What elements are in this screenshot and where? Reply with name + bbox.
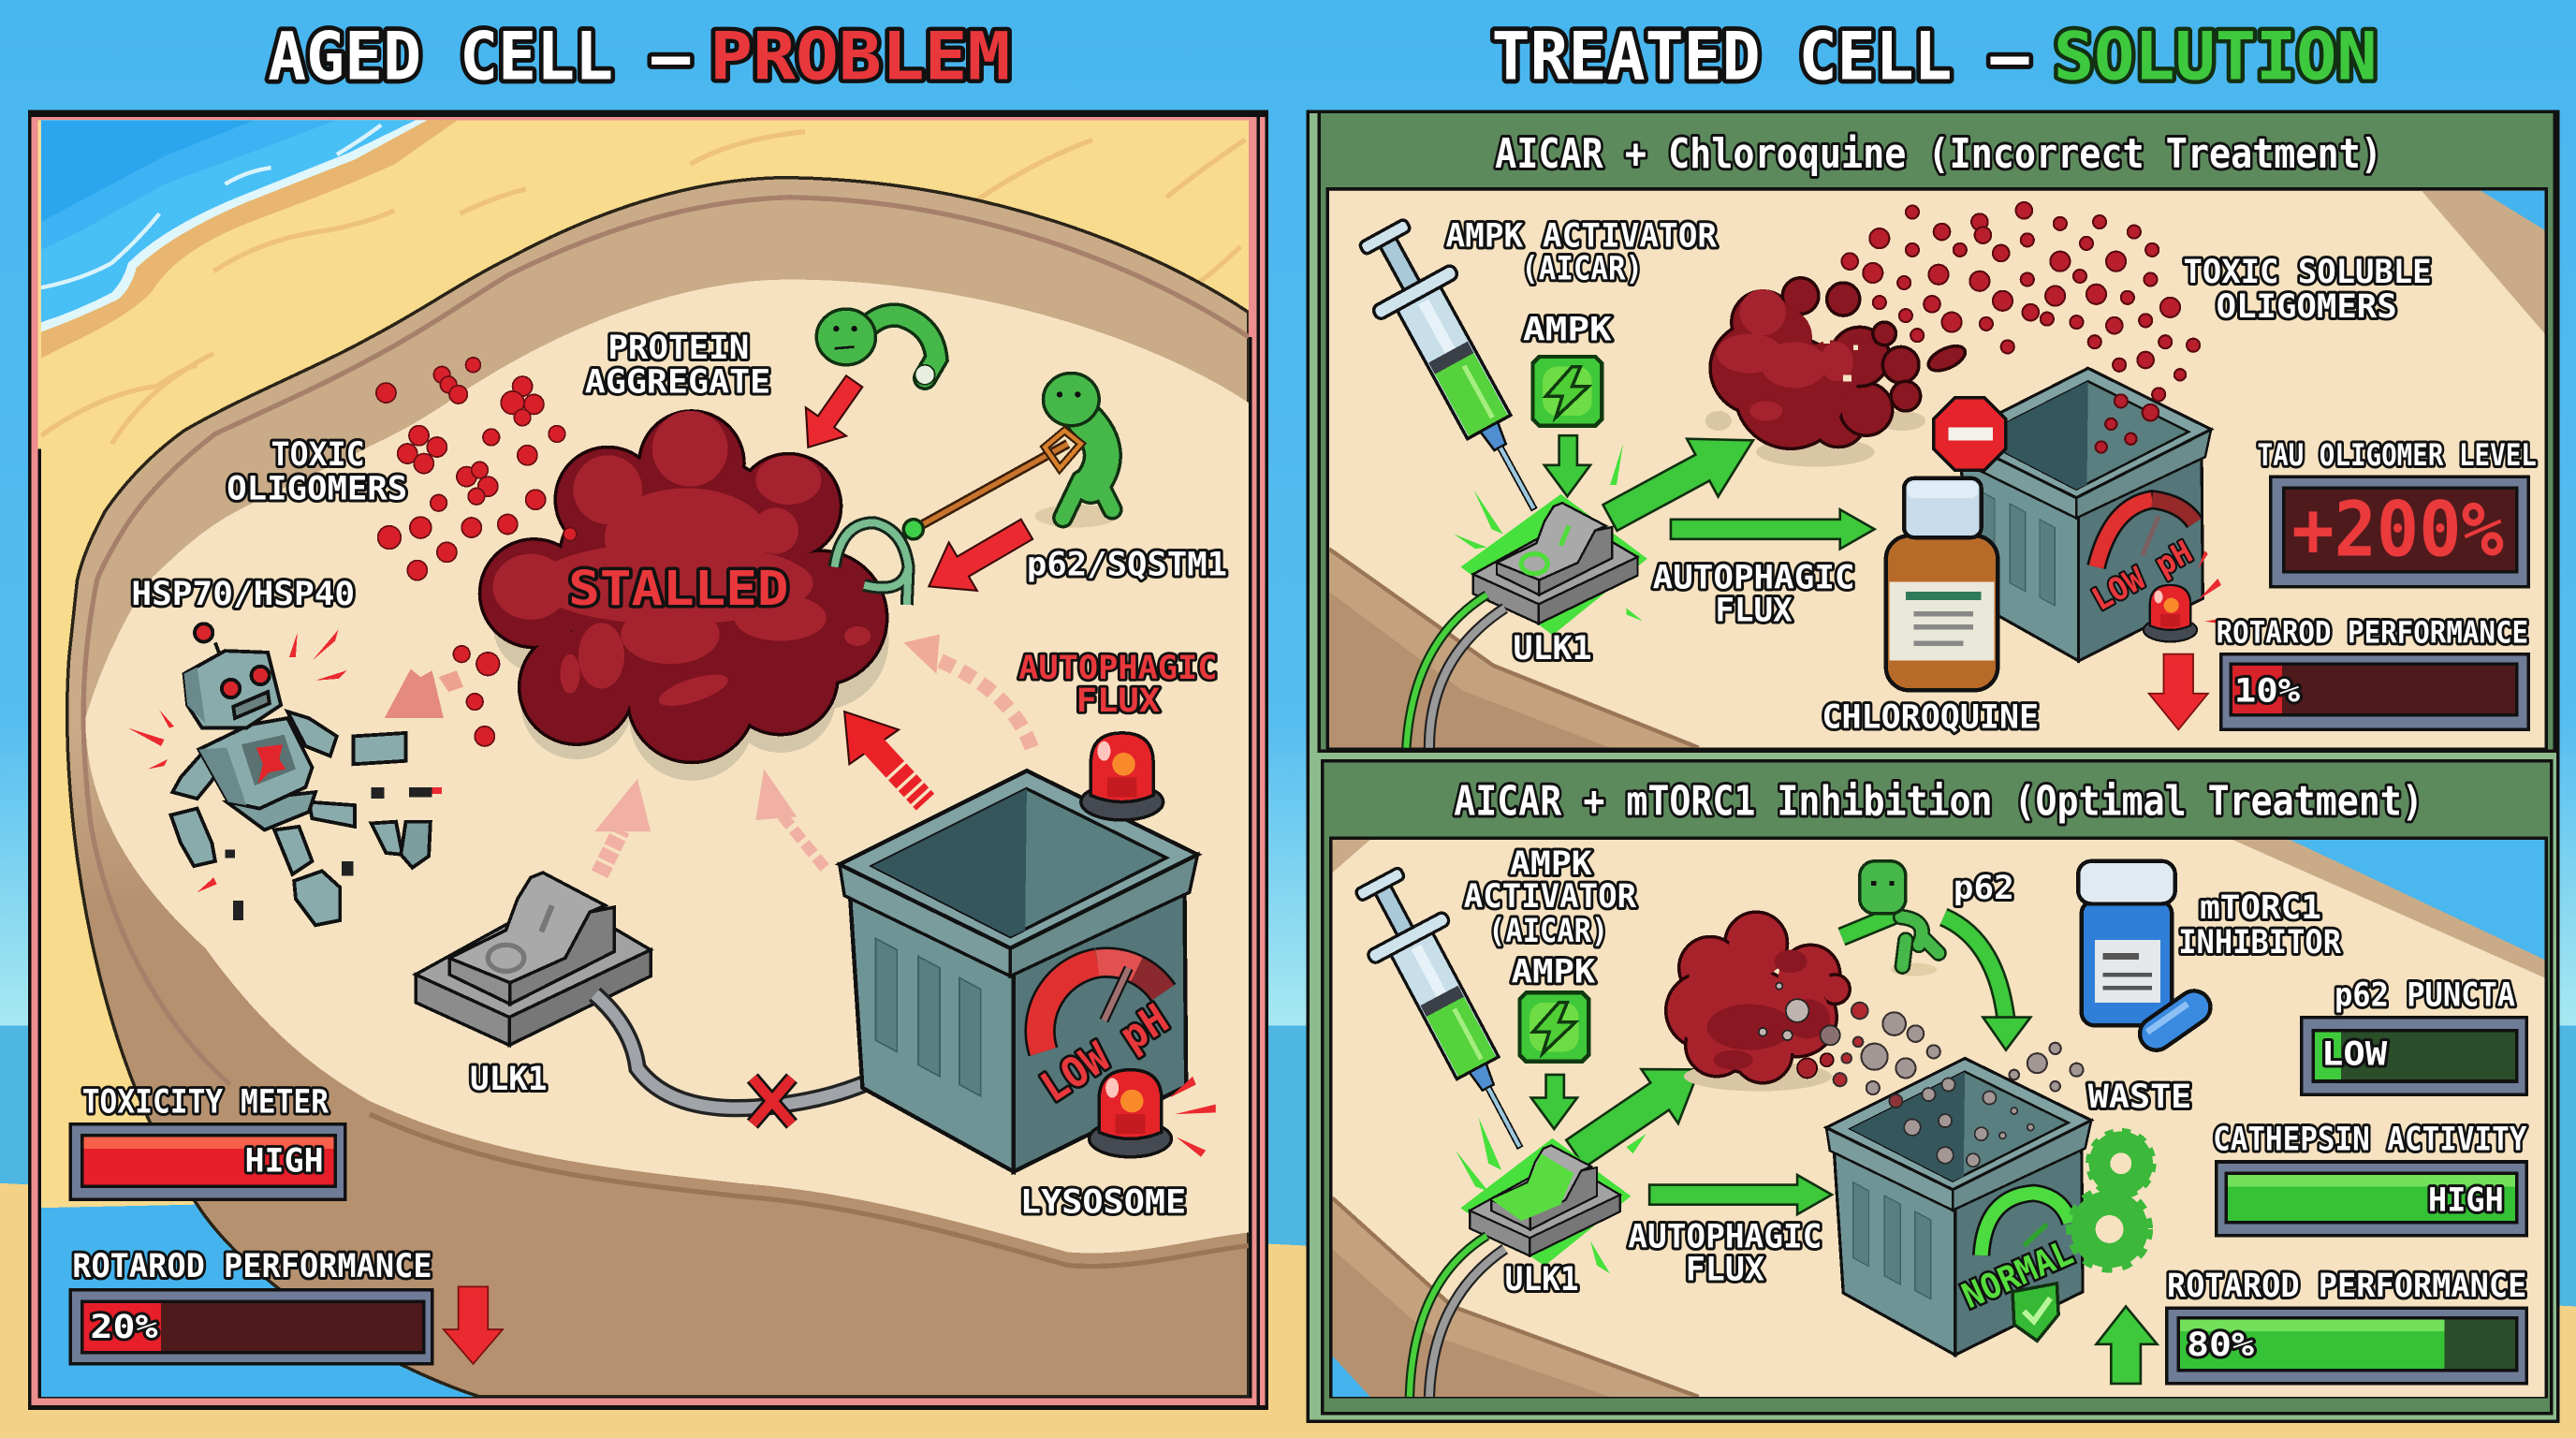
meter: p62 puncta: p62 PUNCTA (2334, 976, 2515, 1014)
title: treated cell solution (1492, 18, 2378, 95)
scene background: mtorc1 (1332, 840, 2545, 1397)
label: toxic oligomers: TOXIC (271, 435, 365, 474)
label: autophagic flux (1018, 649, 1218, 720)
label: autophagic flux: AUTOPHAGIC (1653, 558, 1855, 596)
label: autophagic flux: FLUX (1076, 682, 1160, 720)
label: toxic soluble oligomers: OLIGOMERS (2217, 287, 2397, 326)
icon: p62 worm (816, 309, 936, 385)
icon: siren bottom (1090, 1070, 1171, 1157)
label: autophagic flux: FLUX (1715, 592, 1793, 630)
arrow: autophagic flux (1649, 1175, 1832, 1214)
icon: ulk1 switch active (1454, 444, 1643, 628)
icon: gears (2070, 1132, 2152, 1269)
arrowhead: faded flux curved (903, 635, 940, 674)
meter: rotarod performance 80%: 80% (2187, 1326, 2254, 1364)
label: mtorc1 inhibitor: mTORC1 (2200, 888, 2321, 927)
icon: lysosome bin (840, 770, 1197, 1172)
meter: rotarod performance 10%: ROTAROD PERFORMANCE (2217, 616, 2528, 650)
arrow: ampk to ulk1 (1544, 435, 1590, 496)
label: ulk1: ULK1 (1513, 629, 1592, 668)
label: ulk1: ULK1 (1505, 1260, 1579, 1299)
label: autophagic flux (1628, 1217, 1822, 1288)
arrow: p62 figure to aggregate (915, 506, 1041, 610)
header: AICAR + mTORC1 Inhibition (Optimal Treatment) (1454, 778, 2423, 826)
icon: ulk1 switch (416, 873, 651, 1045)
meter: toxicity: TOXICITY METER (82, 1082, 329, 1121)
icon: siren top (1081, 733, 1164, 820)
label: toxic oligomers: OLIGOMERS (227, 470, 407, 508)
panel: aged cell (28, 110, 1268, 1410)
label: ampk: AMPK (1523, 310, 1612, 348)
meter: tau oligomer level: +200% (2291, 486, 2504, 574)
arrow: rotarod down (444, 1286, 503, 1364)
arrow: faded flux curved (940, 661, 1032, 748)
toxic oligomer particles (376, 358, 577, 746)
icon: p62 figure (1860, 861, 1939, 976)
icon: cables (1406, 594, 1505, 748)
title: treated cell solution: TREATED CELL – (1492, 18, 2029, 95)
title: treated cell solution: SOLUTION (2054, 18, 2378, 95)
label: toxic soluble oligomers (2184, 253, 2432, 326)
label: autophagic flux: AUTOPHAGIC (1018, 649, 1218, 687)
meter: tau oligomer level (2258, 439, 2537, 587)
icon: chloroquine bottle (1886, 478, 1998, 690)
label: protein aggregate: PROTEIN (607, 329, 749, 367)
label: toxic oligomers (227, 435, 407, 508)
label: autophagic flux: FLUX (1686, 1250, 1764, 1288)
arrow: ulk1 to aggregate (1557, 1042, 1718, 1181)
label: toxic soluble oligomers: TOXIC SOLUBLE (2184, 253, 2432, 291)
icon: ampk bolt (1519, 992, 1588, 1062)
particles falling in (2096, 352, 2186, 453)
icon: ulk1 switch active (1456, 1118, 1647, 1273)
meter: toxicity (70, 1082, 345, 1199)
header: AICAR + Chloroquine (Incorrect Treatment) (1495, 130, 2382, 178)
icon: alarm sparks (1170, 1077, 1216, 1157)
icon: syringe aicar (1341, 209, 1574, 531)
scene background: chloroquine (1329, 191, 2545, 748)
icon: cables (1410, 1236, 1505, 1397)
meter: rotarod performance 10%: 10% (2234, 672, 2300, 711)
label: waste: WASTE (2088, 1078, 2191, 1116)
label: stalled: STALLED (568, 562, 788, 617)
gauge: normal (1956, 1193, 2079, 1316)
icon: siren (2144, 585, 2197, 641)
icon: ampk bolt (1533, 357, 1602, 426)
icon: severed cable (594, 994, 896, 1124)
label: ampk activator: AMPK ACTIVATOR (1445, 216, 1718, 255)
gauge: normal: NORMAL (1956, 1232, 2079, 1316)
label: chloroquine: CHLOROQUINE (1822, 698, 2039, 737)
subpanel: aicar + mtorc1 inhibition (1321, 759, 2553, 1415)
meter: p62 puncta (2302, 976, 2526, 1094)
arrow: red flux from lysosome (844, 712, 929, 805)
meter: p62 puncta: LOW (2321, 1034, 2388, 1073)
label: ampk activator: (AICAR) (1521, 250, 1643, 288)
label: protein aggregate (585, 329, 770, 402)
meter: toxicity: HIGH (245, 1142, 324, 1181)
icon: check badge (2012, 1284, 2058, 1341)
arrow: p62 curved to bin (1841, 914, 2030, 1050)
meter: rotarod performance 20% (70, 1247, 432, 1364)
waste particles (1834, 1003, 2083, 1094)
label: autophagic flux: AUTOPHAGIC (1628, 1217, 1822, 1255)
label: ampk activator (1445, 216, 1718, 288)
title: aged cell problem: PROBLEM (710, 18, 1010, 95)
arrow: p62 worm to aggregate (788, 367, 874, 462)
arrow: faded flux from lysosome left (755, 770, 825, 868)
meter: tau oligomer level: TAU OLIGOMER LEVEL (2258, 439, 2537, 473)
label: ampk activator: ACTIVATOR (1464, 877, 1637, 916)
label: ampk activator (1464, 844, 1637, 950)
label: protein aggregate: AGGREGATE (585, 363, 770, 402)
arrow: ampk to ulk1 (1531, 1075, 1577, 1129)
icon: active lysosome bin (1826, 1058, 2091, 1355)
icon: p62 figure with hook (835, 374, 1117, 605)
icon: broken hsp robot (128, 624, 442, 925)
meter: cathepsin activity: HIGH (2428, 1181, 2504, 1220)
icon: syringe aicar (1338, 858, 1559, 1168)
gauge: low ph: LOW pH (2086, 534, 2198, 618)
panel: treated cell (1306, 110, 2559, 1423)
waste inside bin (1889, 1078, 2034, 1167)
label: p62: p62 (1954, 869, 2014, 907)
meter: cathepsin activity (2213, 1121, 2526, 1236)
label: mtorc1 inhibitor: INHIBITOR (2178, 923, 2342, 961)
icon: degrading aggregate (1666, 912, 1850, 1092)
label: autophagic flux (1653, 558, 1855, 630)
icon: mtorc1 inhibitor bottle and pill (2078, 861, 2217, 1057)
label: mtorc1 inhibitor (2178, 888, 2342, 961)
label: ampk activator: (AICAR) (1488, 912, 1608, 950)
title: aged cell problem: AGED CELL – (268, 18, 691, 95)
label: ampk: AMPK (1512, 953, 1595, 991)
arrow: ulk1 to aggregate (1594, 411, 1769, 547)
chart element: protein aggregate blob (481, 411, 889, 781)
meter: cathepsin activity: CATHEPSIN ACTIVITY (2213, 1121, 2526, 1159)
title: aged cell problem (268, 18, 1010, 95)
toxic soluble oligomer particles (1841, 202, 2200, 353)
arrow: faded flux to hsp (385, 668, 463, 718)
icon: fragmenting aggregate (1705, 278, 1969, 467)
meter: rotarod performance 80% (2167, 1267, 2526, 1384)
icon: stop sign (1934, 398, 2006, 470)
meter: rotarod performance 10% (2217, 616, 2528, 729)
meter: rotarod performance 20%: ROTAROD PERFORMANCE (72, 1247, 432, 1285)
gauge: low ph: LOW pH (1032, 995, 1177, 1112)
arrow: autophagic flux (1671, 509, 1875, 549)
subpanel: aicar + chloroquine (1318, 110, 2556, 753)
arrow: rotarod up (2097, 1306, 2157, 1384)
icon: bin blocked (1954, 352, 2211, 661)
meter: rotarod performance 20%: 20% (91, 1308, 157, 1346)
label: ampk activator: AMPK (1510, 844, 1592, 883)
label: lysosome: LYSOSOME (1020, 1182, 1186, 1221)
meter: rotarod performance 80%: ROTAROD PERFORMANCE (2167, 1267, 2526, 1305)
arrow: faded flux from ulk1 (594, 779, 651, 874)
label: p62/sqstm1: p62/SQSTM1 (1027, 545, 1227, 583)
label: hsp70/hsp40: HSP70/HSP40 (131, 575, 355, 613)
icon: alarm sparks (2198, 550, 2226, 624)
arrow: rotarod down (2149, 654, 2208, 729)
label: ulk1: ULK1 (470, 1060, 547, 1098)
